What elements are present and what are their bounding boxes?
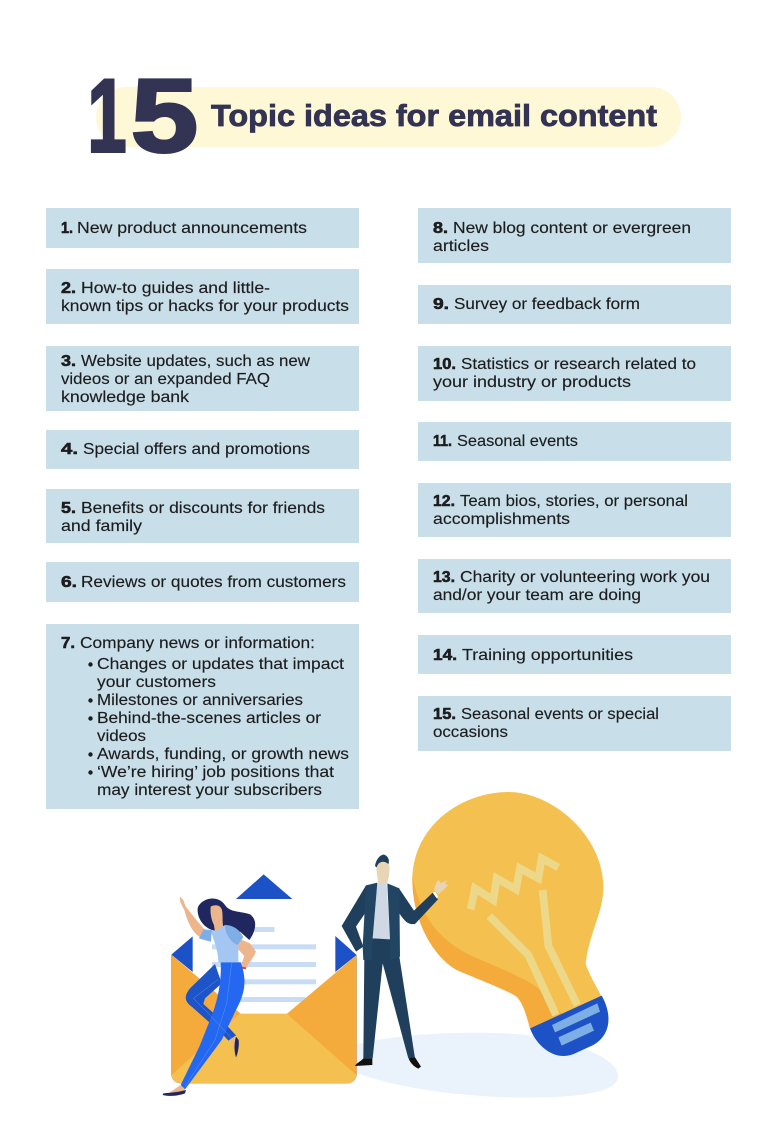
panel: item 8	[418, 208, 731, 263]
panel: item 2	[46, 269, 359, 324]
panel: item 7: 7.	[61, 635, 75, 652]
panel: item 3: videos or an expanded FAQ	[61, 371, 270, 388]
illustration: ground shadow	[343, 1033, 618, 1098]
panel: item 7: Behind-the-scenes articles or	[97, 710, 322, 727]
panel: item 5: and family	[61, 518, 142, 535]
icon: blue top triangle	[236, 874, 292, 899]
panel: item 1	[46, 208, 359, 248]
panel: item 7: Awards, funding, or growth news	[97, 746, 349, 763]
illustration: woman	[163, 897, 256, 1096]
panel: item 7	[46, 624, 359, 809]
panel: item 7: videos	[97, 728, 146, 745]
panel: item 2: How-to guides and little-	[81, 280, 270, 297]
big number 15: 5	[131, 58, 198, 174]
panel: item 13: and/or your team are doing	[433, 587, 641, 604]
title text: Topic ideas for email content	[211, 98, 657, 133]
panel: item 4	[46, 430, 359, 469]
panel: item 10	[418, 346, 731, 401]
panel: item 12: 12.	[433, 493, 455, 510]
panel: item 2: known tips or hacks for your products	[61, 298, 349, 315]
panel: item 7: ‘We’re hiring’ job positions that	[97, 764, 335, 781]
panel: item 9: Survey or feedback form	[454, 296, 640, 313]
panel: item 10: Statistics or research related to	[461, 356, 696, 373]
panel: item 10: 10.	[433, 356, 456, 373]
panel: item 15: Seasonal events or special	[461, 706, 659, 723]
panel: item 3: 3.	[61, 353, 76, 370]
panel: item 5: Benefits or discounts for friends	[81, 500, 325, 517]
panel: item 8: New blog content or evergreen	[453, 220, 691, 237]
panel: item 1: New product announcements	[77, 220, 307, 237]
panel: item 12: accomplishments	[433, 511, 570, 528]
panel: item 8: articles	[433, 238, 489, 255]
illustration: man	[342, 855, 448, 1069]
panel: item 6	[46, 562, 359, 602]
panel: item 13: 13.	[433, 569, 455, 586]
title	[88, 58, 681, 174]
panel: item 5	[46, 489, 359, 543]
panel: item 2: 2.	[61, 280, 76, 297]
panel: item 8: 8.	[433, 220, 448, 237]
panel: item 5: 5.	[61, 500, 76, 517]
panel: item 3	[46, 346, 359, 411]
panel: item 10: your industry or products	[433, 374, 631, 391]
panel: item 14: 14.	[433, 647, 457, 664]
panel: item 15: occasions	[433, 724, 508, 741]
big number 15	[88, 58, 198, 174]
panel: item 15: 15.	[433, 706, 456, 723]
panel: item 11	[418, 422, 731, 461]
panel: item 7: your customers	[97, 674, 216, 691]
envelope front flap	[171, 1014, 357, 1083]
envelope side flaps	[171, 955, 241, 1076]
panel: item 9	[418, 285, 731, 324]
panel: item 6: Reviews or quotes from customers	[81, 574, 346, 591]
panel: item 6: 6.	[61, 574, 77, 591]
letter paper	[193, 899, 335, 1017]
panel: item 7: may interest your subscribers	[97, 782, 322, 799]
panel: item 1: 1.	[61, 220, 73, 237]
panel: item 9: 9.	[433, 296, 449, 313]
big number 15: 1	[88, 58, 126, 174]
panel: item 7: Changes or updates that impact	[97, 656, 345, 673]
panel: item 13: Charity or volunteering work you	[460, 569, 710, 586]
panel: item 7: Company news or information:	[80, 635, 315, 652]
panel: item 12	[418, 483, 731, 537]
panel: item 3: knowledge bank	[61, 389, 190, 406]
panel: item 15	[418, 696, 731, 751]
panel: item 3: Website updates, such as new	[81, 353, 310, 370]
panel: item 11: Seasonal events	[457, 433, 578, 450]
panel: item 4: Special offers and promotions	[83, 441, 310, 458]
illustration: light bulb	[412, 792, 608, 1056]
panel: item 14: Training opportunities	[462, 647, 633, 664]
panel: item 13	[418, 559, 731, 613]
letter text lines	[212, 927, 316, 1002]
panel: item 12: Team bios, stories, or personal	[460, 493, 688, 510]
title pill background	[96, 87, 681, 147]
panel: item 11: 11.	[433, 433, 452, 450]
illustration: envelope	[171, 874, 357, 1083]
panel: item 14	[418, 635, 731, 674]
panel: item 4: 4.	[61, 441, 78, 458]
panel: item 7: Milestones or anniversaries	[97, 692, 303, 709]
